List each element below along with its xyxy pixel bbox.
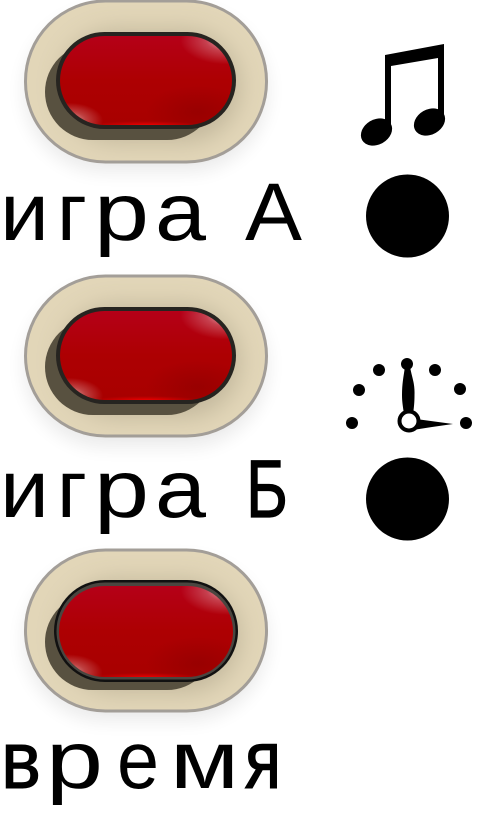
label: игра А: и bbox=[0, 167, 49, 258]
button: игра А bbox=[24, 1, 268, 172]
label: игра Б: и bbox=[0, 444, 49, 535]
button face bbox=[60, 36, 232, 125]
housing bbox=[26, 276, 266, 436]
label: время: я bbox=[245, 715, 281, 806]
label: время: р bbox=[46, 715, 103, 806]
button border bbox=[56, 32, 236, 129]
label: игра А: а bbox=[155, 167, 206, 258]
icon: clock bbox=[346, 358, 472, 430]
label: время: е bbox=[117, 715, 159, 806]
cast shadow bbox=[45, 594, 215, 690]
housing inner shade bbox=[60, 30, 240, 142]
housing shadow bbox=[24, 10, 268, 172]
housing inner shade bbox=[60, 580, 240, 692]
label: игра Б: г bbox=[57, 444, 87, 535]
housing shadow bbox=[24, 285, 268, 447]
button border bbox=[54, 580, 238, 682]
housing bbox=[26, 1, 266, 162]
label: игра Б: р bbox=[94, 444, 149, 535]
housing shadow bbox=[24, 559, 268, 721]
indicator dot: clock bbox=[366, 458, 449, 540]
cast shadow bbox=[45, 44, 215, 140]
label: время: м bbox=[170, 715, 239, 806]
label: время: в bbox=[1, 715, 41, 806]
label: игра Б: Б bbox=[246, 444, 288, 535]
button face bbox=[60, 311, 232, 400]
housing bbox=[26, 550, 266, 711]
label: игра А: г bbox=[57, 167, 87, 258]
icon: music note bbox=[356, 44, 450, 151]
button: игра Б bbox=[24, 276, 268, 447]
cast shadow bbox=[45, 319, 215, 415]
indicator dot: music bbox=[366, 174, 449, 258]
button rim bbox=[56, 582, 236, 680]
label: игра А: А bbox=[245, 167, 302, 258]
housing inner shade bbox=[60, 305, 240, 417]
button: время bbox=[24, 550, 268, 721]
button face bbox=[59, 586, 233, 677]
button border bbox=[56, 307, 236, 404]
label: игра Б: а bbox=[155, 444, 206, 535]
label: игра А: р bbox=[94, 167, 149, 258]
